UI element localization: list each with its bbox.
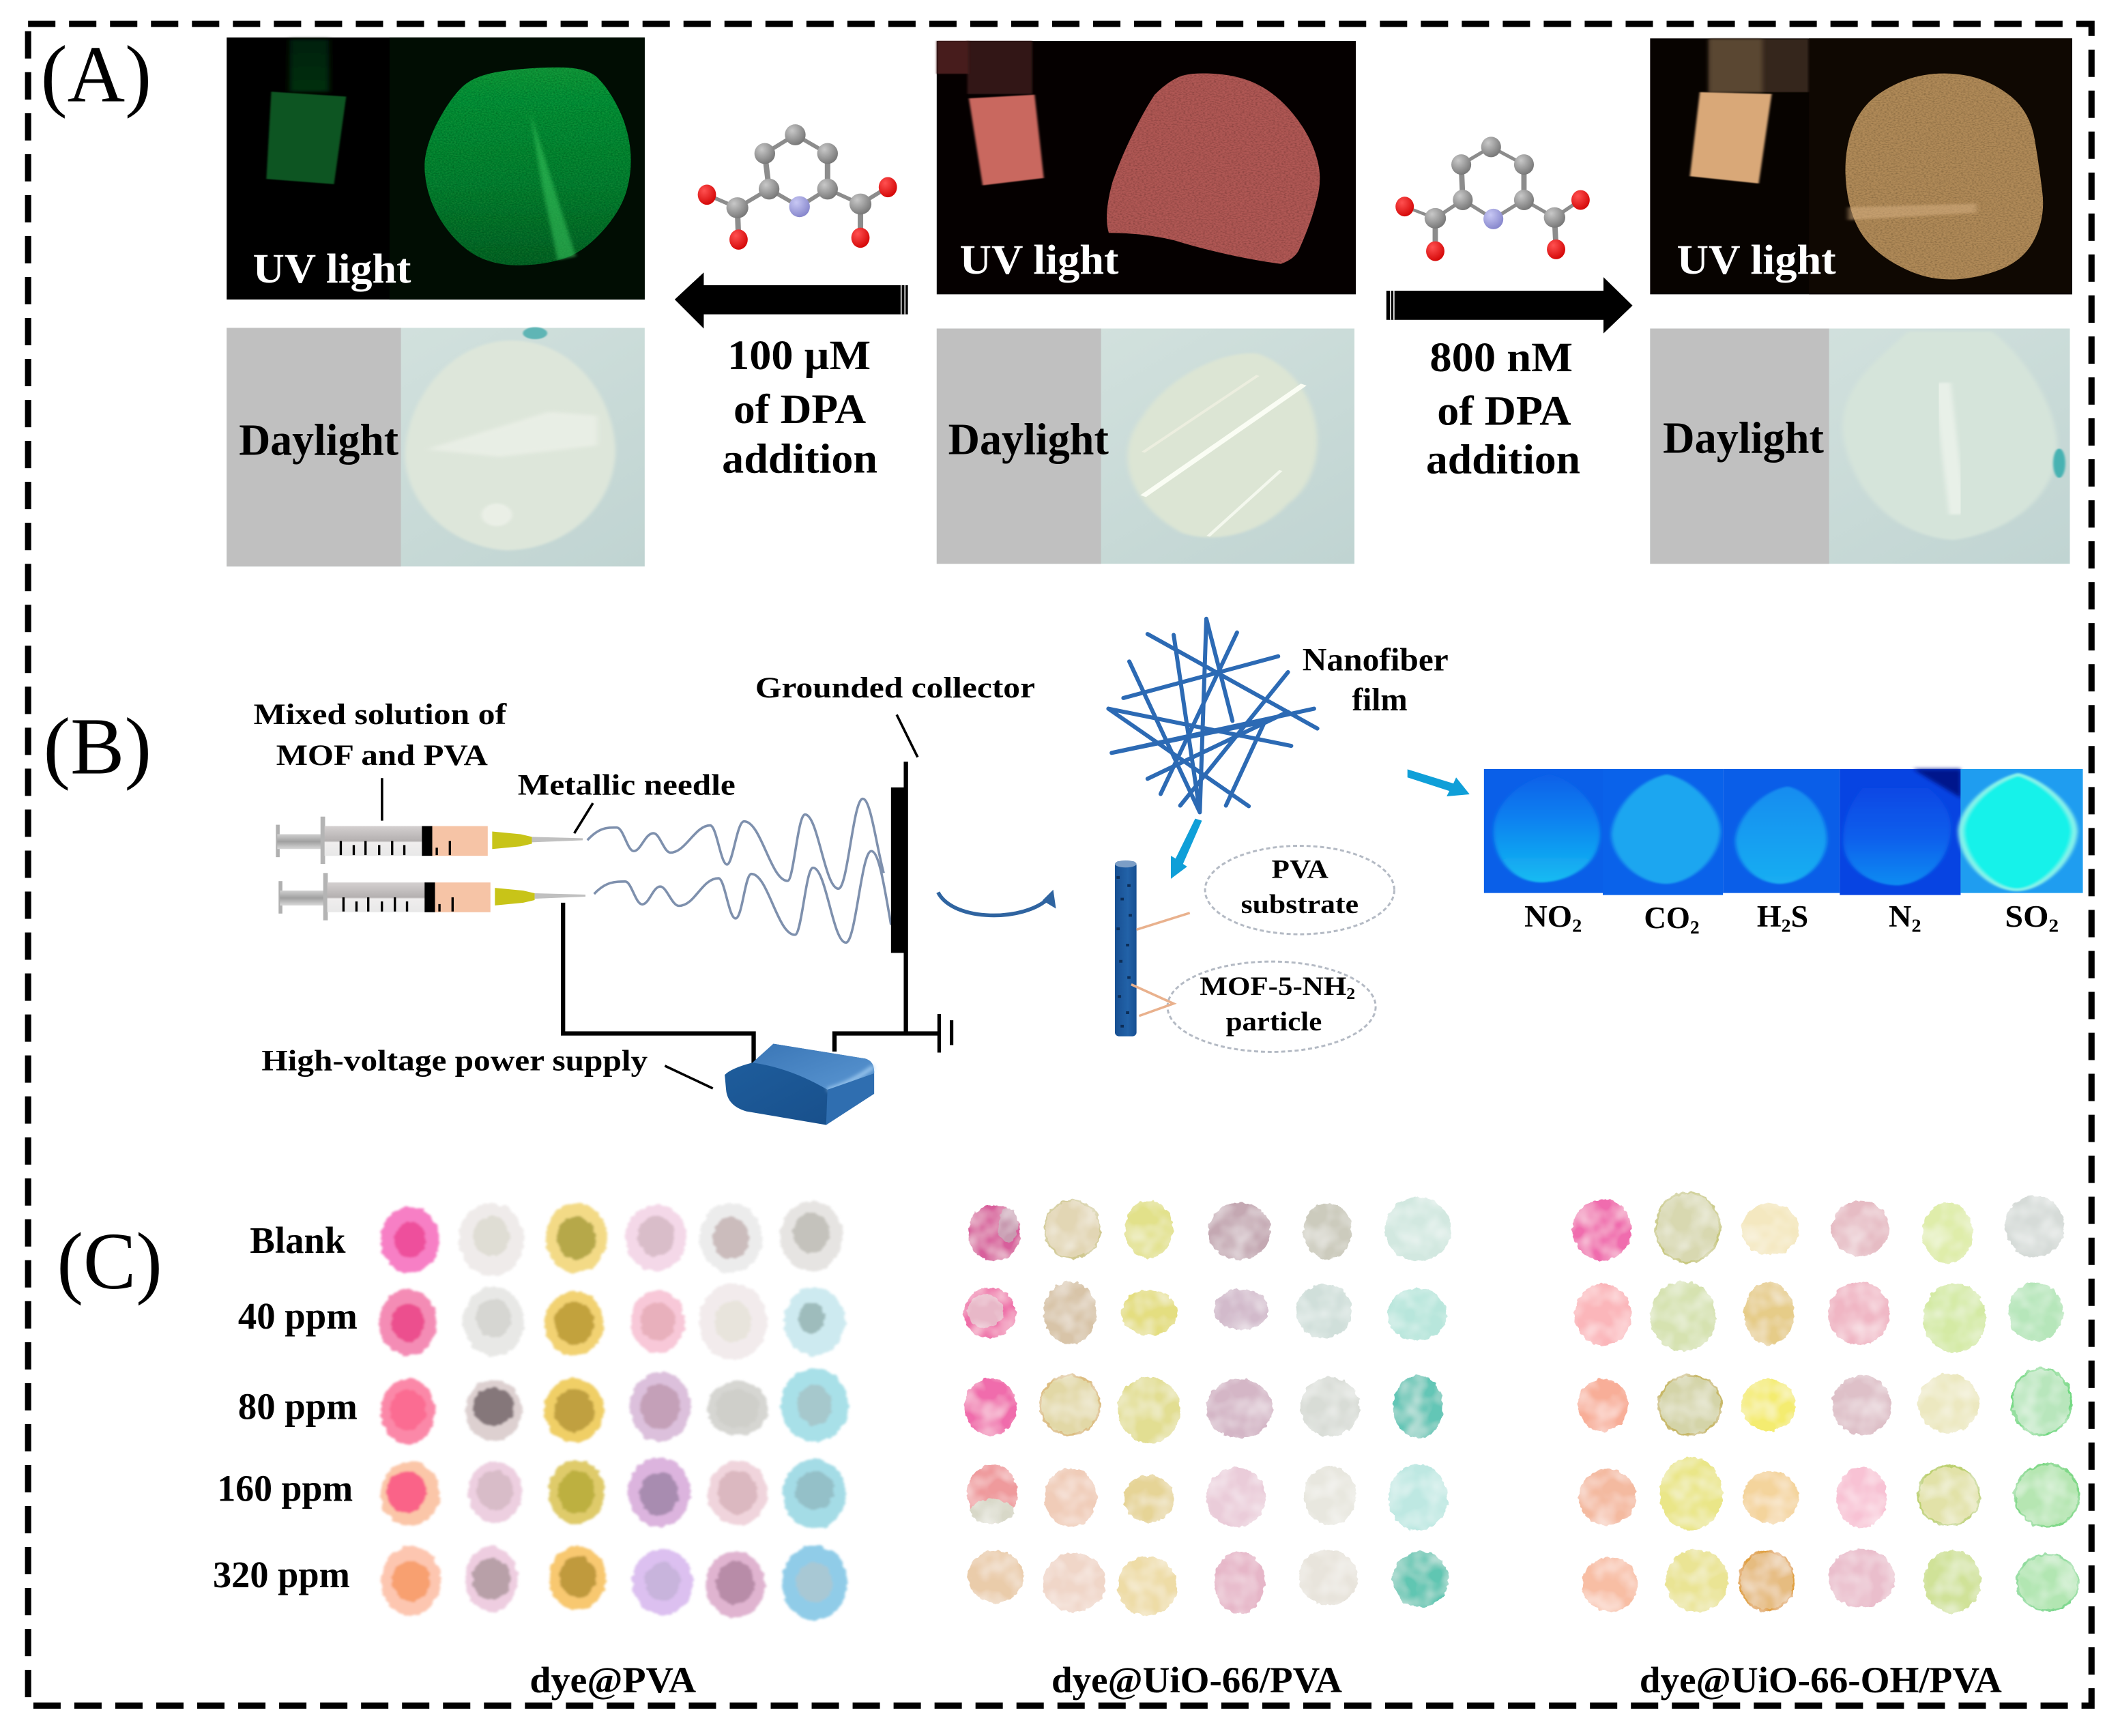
label: Daylight: Daylight bbox=[948, 415, 1109, 464]
label: nanofiber film: film bbox=[1352, 682, 1408, 718]
gas labels: 2 bbox=[2048, 915, 2059, 936]
row labels: concentrations: 80 ppm bbox=[238, 1386, 358, 1428]
gas labels: 2 bbox=[1912, 915, 1921, 936]
label: Daylight: Daylight bbox=[239, 416, 398, 465]
spot array: dye@UiO-66/PVA bbox=[963, 1197, 1451, 1616]
callout: MOF-5-NH2 particle bbox=[1131, 961, 1376, 1052]
gas labels: 2 bbox=[1572, 915, 1582, 936]
panel C: dye spot arrays bbox=[57, 1193, 2079, 1701]
photo: NO2 film bbox=[1484, 769, 1603, 893]
leader lines bbox=[382, 714, 918, 1088]
gas labels bbox=[1524, 899, 2059, 938]
label: mixed solution of MOF and PVA: Mixed solution of bbox=[254, 698, 507, 731]
photo: SO2 film bbox=[1960, 769, 2083, 893]
icon: DPA molecule (left) bbox=[698, 124, 897, 250]
row labels: concentrations: 160 ppm bbox=[217, 1467, 353, 1509]
photo: H2S film bbox=[1723, 769, 1840, 893]
photo: second film in daylight bbox=[937, 328, 1354, 564]
gas labels: SO bbox=[2005, 899, 2046, 934]
text: 800 nM of DPA addition: 800 nM bbox=[1429, 334, 1573, 381]
row labels: concentrations: 320 ppm bbox=[213, 1554, 350, 1595]
gas labels: N bbox=[1889, 899, 1911, 934]
photos: gas sensing films under UV bbox=[1484, 769, 2083, 895]
label: mixed solution of MOF and PVA bbox=[254, 698, 507, 772]
icon: lower syringe bbox=[278, 873, 585, 921]
gas labels: S bbox=[1791, 899, 1808, 934]
spot array: dye@UiO-66-OH/PVA bbox=[1572, 1193, 2079, 1613]
arrow: curved rotation bbox=[938, 890, 1056, 915]
label: high-voltage power supply: High-voltage power supply bbox=[261, 1045, 648, 1077]
gas labels: 2 bbox=[1782, 915, 1791, 936]
callout: PVA substrate bbox=[1137, 846, 1394, 934]
photo: red film under UV light bbox=[937, 41, 1356, 294]
arrow: mesh to single fiber bbox=[1171, 819, 1202, 879]
gas labels: NO bbox=[1524, 899, 1571, 934]
label: nanofiber film bbox=[1303, 643, 1449, 718]
text: 100 µM of DPA addition: addition bbox=[722, 435, 877, 482]
row labels: concentrations bbox=[213, 1219, 358, 1595]
caption: dye@UiO-66-OH/PVA: dye@UiO-66-OH/PVA bbox=[1640, 1660, 2002, 1701]
photo: green film under UV light bbox=[227, 38, 645, 300]
callout: PVA substrate: PVA bbox=[1272, 854, 1328, 884]
callout: PVA substrate: substrate bbox=[1241, 889, 1359, 919]
photo: orange film under UV light bbox=[1650, 38, 2072, 294]
label: metallic needle: Metallic needle bbox=[518, 769, 736, 802]
icon: single fiber cylinder bbox=[1115, 860, 1137, 1037]
photo: third film in daylight bbox=[1650, 328, 2070, 564]
label: UV light: UV light bbox=[1677, 237, 1836, 283]
row labels: concentrations: Blank bbox=[250, 1219, 346, 1261]
label: nanofiber film: Nanofiber bbox=[1303, 643, 1449, 678]
gas labels: H bbox=[1757, 899, 1781, 934]
spot array: dye@PVA bbox=[379, 1202, 848, 1620]
text: 800 nM of DPA addition bbox=[1426, 334, 1580, 482]
text: 800 nM of DPA addition: of DPA bbox=[1437, 388, 1571, 435]
icon: nanofiber mesh bbox=[1108, 619, 1318, 812]
caption: dye@PVA: dye@PVA bbox=[529, 1660, 697, 1701]
gas labels: CO bbox=[1644, 900, 1691, 935]
arrow: toward orange film bbox=[1386, 277, 1633, 334]
callout: MOF-5-NH2 particle: particle bbox=[1226, 1007, 1322, 1037]
icon: high-voltage power supply box bbox=[725, 1044, 874, 1125]
gas labels: 2 bbox=[1690, 916, 1700, 938]
callout: MOF-5-NH2 particle: 2 bbox=[1346, 985, 1355, 1003]
heading: (A): (A) bbox=[41, 29, 151, 119]
photo: first film in daylight bbox=[227, 327, 645, 566]
icon: DPA molecule (right) bbox=[1395, 136, 1590, 261]
text: 100 µM of DPA addition: 100 µM bbox=[727, 332, 871, 379]
grounded collector plate and wiring bbox=[563, 762, 952, 1066]
photo: CO2 film bbox=[1603, 769, 1723, 895]
callout: MOF-5-NH2 particle: MOF-5-NH bbox=[1200, 971, 1335, 1001]
row labels: concentrations: 40 ppm bbox=[238, 1295, 358, 1337]
panel A: fluorescence films bbox=[41, 29, 2072, 566]
icon: upper syringe bbox=[276, 817, 583, 864]
caption: dye@UiO-66/PVA: dye@UiO-66/PVA bbox=[1051, 1660, 1342, 1701]
photo: N2 film bbox=[1840, 769, 1960, 895]
heading: (C): (C) bbox=[57, 1216, 162, 1306]
text: 100 µM of DPA addition: of DPA bbox=[734, 386, 866, 433]
arrow: mesh to sensing photos bbox=[1408, 769, 1470, 796]
label: UV light: UV light bbox=[959, 237, 1119, 283]
label: grounded collector: Grounded collector bbox=[755, 671, 1035, 704]
arrow: toward green film bbox=[675, 272, 908, 328]
label: UV light: UV light bbox=[253, 246, 411, 292]
text: 100 µM of DPA addition bbox=[722, 332, 877, 482]
label: mixed solution of MOF and PVA: MOF and PVA bbox=[276, 739, 488, 772]
panel B: electrospinning and gas sensing bbox=[44, 619, 2083, 1125]
label: Daylight: Daylight bbox=[1663, 414, 1824, 463]
heading: (B): (B) bbox=[44, 701, 151, 791]
fiber jets: two wavy lines bbox=[587, 799, 891, 942]
text: 800 nM of DPA addition: addition bbox=[1426, 436, 1580, 482]
